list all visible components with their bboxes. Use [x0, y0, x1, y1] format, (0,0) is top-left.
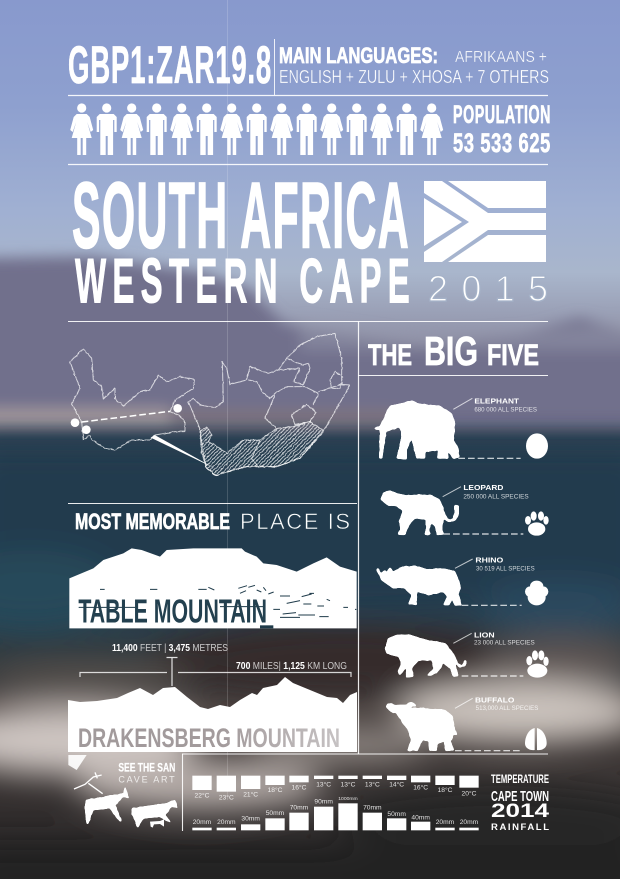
population figure: POPULATION	[453, 101, 551, 129]
chart: monthly temperature: 21°C	[243, 790, 258, 798]
languages block: ENGLISH + ZULU + XHOSA + 7 OTHERS	[279, 67, 549, 87]
languages block	[274, 39, 549, 95]
chart: monthly rainfall: 40mm	[411, 814, 430, 821]
Table Mountain label: TABLE MOUNTAIN	[78, 594, 267, 631]
lion label: 23 000 ALL SPECIES	[474, 641, 535, 647]
elephant label	[453, 396, 537, 414]
heading: most memorable place: PLACE IS	[240, 509, 350, 534]
chart: monthly temperature: 14°C	[389, 780, 404, 788]
San heading: SEE THE SAN	[118, 762, 175, 775]
height annotation: 11,400 FEET | 3,475 METRES	[112, 642, 228, 654]
heading: the big five: BIG	[424, 328, 478, 374]
chart: monthly rainfall: 20mm	[193, 819, 212, 826]
lion silhouette	[385, 635, 467, 677]
map: route between towns	[71, 404, 182, 434]
heading: the big five: FIVE	[487, 339, 539, 372]
rhino label	[455, 555, 535, 573]
population figure: 53 533 625	[453, 128, 551, 158]
chart: monthly rainfall: 50mm	[387, 811, 406, 818]
chart: monthly temperature: 13°C	[341, 780, 356, 788]
chart: monthly temperature	[192, 776, 479, 801]
elephant footprint	[458, 433, 548, 459]
year: 2015	[428, 268, 548, 309]
heading: the big five	[368, 328, 539, 374]
buffalo label: 513,000 ALL SPECIES	[476, 706, 538, 712]
length annotation: 700 MILES| 1,125 KM LONG	[236, 660, 347, 672]
legend: temperature, Cape Town 2014, rainfall: TEMPERATURE	[491, 774, 549, 786]
rhino label: RHINO	[475, 555, 504, 564]
heading: most memorable place: MOST MEMORABLE	[75, 509, 230, 534]
panel: San cave art	[68, 755, 177, 828]
languages block: AFRIKAANS +	[455, 49, 547, 66]
legend: temperature, Cape Town 2014, rainfall: 2014	[491, 801, 550, 822]
lion paw print	[462, 650, 549, 678]
Drakensberg label: DRAKENSBERG MOUNTAIN	[78, 723, 340, 753]
chart: monthly rainfall: 20mm	[460, 819, 479, 826]
chart: monthly temperature: 22°C	[195, 792, 210, 800]
map: South Africa and Western Cape	[70, 333, 350, 476]
lion label: LION	[474, 630, 495, 639]
chart: monthly temperature: 16°C	[292, 784, 307, 792]
map: pointer wedge	[151, 435, 215, 468]
chart: monthly temperature: 16°C	[413, 784, 428, 792]
buffalo silhouette	[386, 702, 457, 751]
leopard paw print	[443, 511, 549, 536]
rhino silhouette	[377, 566, 462, 606]
San heading: CAVE ART	[118, 775, 175, 785]
title	[72, 162, 416, 316]
leopard silhouette	[381, 490, 459, 535]
rhino label: 30 519 ALL SPECIES	[476, 567, 535, 573]
buffalo hoof print	[455, 728, 547, 751]
leopard label	[443, 483, 529, 500]
elephant label: 680 000 ALL SPECIES	[474, 408, 537, 414]
icon: South African flag	[424, 181, 546, 262]
animal: leopard	[381, 483, 549, 536]
map: country outline and provinces	[188, 333, 350, 476]
languages block: MAIN LANGUAGES:	[279, 43, 438, 68]
panel: Table Mountain silhouette	[69, 548, 357, 631]
chart: monthly temperature: 18°C	[438, 786, 453, 794]
chart: monthly rainfall: 20mm	[217, 819, 236, 826]
elephant label: ELEPHANT	[474, 396, 520, 405]
elephant silhouette	[373, 401, 459, 459]
buffalo label	[455, 695, 538, 712]
chart: monthly rainfall: 70mm	[290, 804, 309, 811]
chart: monthly rainfall: 20mm	[436, 819, 455, 826]
cave art: figures and animals	[74, 772, 177, 828]
rhino footprint	[462, 581, 548, 605]
animal: rhino	[377, 555, 548, 606]
lion label	[453, 630, 535, 647]
chart: monthly temperature: 13°C	[365, 780, 380, 788]
chart: monthly temperature: 18°C	[268, 786, 283, 794]
legend: temperature, Cape Town 2014, rainfall: CAPE TOWN	[491, 788, 549, 805]
chart: monthly temperature: 23°C	[219, 793, 234, 801]
chart: monthly temperature: 13°C	[316, 780, 331, 788]
fold line	[226, 0, 228, 800]
animal: lion	[385, 630, 549, 678]
length annotation	[80, 660, 351, 677]
population pictogram	[70, 103, 443, 155]
leopard label: LEOPARD	[463, 483, 503, 492]
legend: temperature, Cape Town 2014, rainfall	[491, 774, 550, 833]
animal: elephant	[373, 396, 548, 459]
leopard label: 250 000 ALL SPECIES	[463, 494, 529, 500]
chart: monthly rainfall: 70mm	[363, 804, 382, 811]
buffalo label: BUFFALO	[475, 695, 515, 704]
chart: monthly rainfall: 50mm	[266, 810, 285, 817]
map: Western Cape enlarged outline	[70, 349, 195, 450]
chart: monthly rainfall	[192, 796, 479, 830]
panel: Drakensberg silhouette	[68, 677, 357, 753]
map: hatched southern provinces	[200, 422, 323, 476]
animal: buffalo	[386, 695, 547, 751]
chart: monthly rainfall: 1000mm	[338, 796, 358, 802]
chart: monthly temperature: 20°C	[462, 789, 477, 797]
San heading	[118, 762, 175, 785]
population figure	[453, 101, 551, 158]
exchange rate heading: GBP1:ZAR19.8	[68, 36, 272, 95]
chart: monthly rainfall: 90mm	[314, 798, 333, 805]
chart: monthly rainfall: 30mm	[241, 816, 260, 823]
heading: the big five: THE	[368, 339, 412, 372]
height annotation	[112, 642, 228, 686]
legend: temperature, Cape Town 2014, rainfall: RAINFALL	[491, 822, 549, 833]
